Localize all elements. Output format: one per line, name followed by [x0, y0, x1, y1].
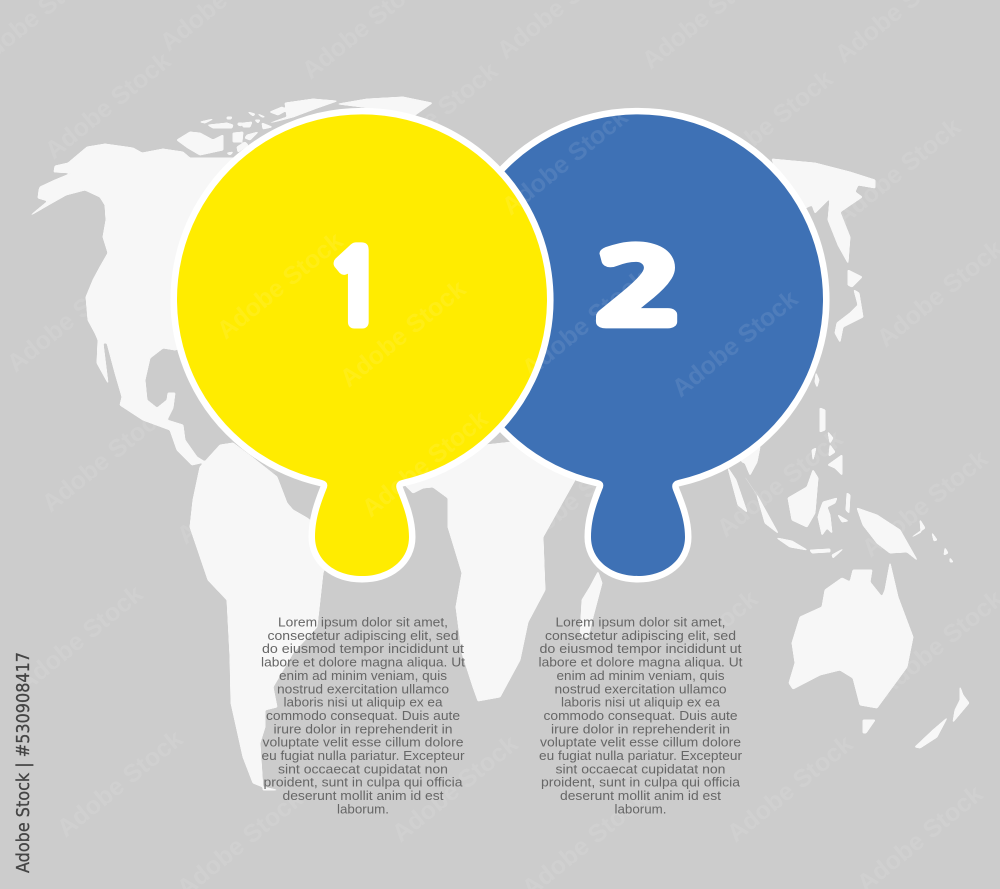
text block: left description: eu fugiat nulla pariatur. Excepteur: [262, 748, 465, 763]
watermark layer under shapes: Adobe Stock: [40, 47, 176, 165]
landmass: Tasmania: [863, 720, 875, 733]
text block: left description: Lorem ipsum dolor sit amet,: [278, 614, 448, 630]
text block: right description: do eiusmod tempor incididunt ut: [540, 641, 742, 656]
watermark layer under shapes: Adobe Stock: [712, 425, 848, 543]
landmass: Japan and Sakhalin: [835, 270, 863, 342]
watermark layer over shapes: Adobe Stock: [357, 405, 493, 523]
watermark layer under shapes: Adobe Stock: [172, 432, 308, 550]
text block: left description: [261, 614, 465, 816]
text block: left description: do eiusmod tempor incididunt ut: [262, 641, 464, 656]
number 2: 2: [595, 239, 683, 338]
watermark layer under shapes: Adobe Stock: [387, 730, 523, 848]
panel: yellow pin 1: [177, 114, 547, 576]
text block: right description: commodo consequat. Duis aute: [544, 708, 738, 723]
text block: left description: laborum.: [337, 801, 389, 816]
text block: left description: consectetur adipiscing elit, sed: [268, 628, 458, 643]
watermark layer under shapes: Adobe Stock: [830, 113, 966, 231]
text block: left description: voluptate velit esse cillum dolore: [262, 735, 464, 750]
panel: blue pin 2: [453, 114, 823, 576]
text block: right description: irure dolor in reprehenderit in: [551, 721, 730, 736]
watermark layer under shapes: Adobe Stock: [702, 65, 838, 183]
watermark layer under shapes: Adobe Stock: [722, 730, 858, 848]
text block: left description: commodo consequat. Duis aute: [266, 708, 460, 723]
text block: left description: enim ad minim veniam, quis: [279, 668, 448, 683]
watermark layer over shapes: [212, 103, 803, 523]
text block: right description: labore et dolore magna aliqua. Ut: [538, 655, 743, 670]
text block: left description: labore et dolore magna aliqua. Ut: [261, 655, 465, 670]
landmass: New Zealand: [915, 687, 969, 748]
text block: right description: deserunt mollit anim id est: [560, 788, 721, 803]
watermark layer under shapes: Adobe Stock: [367, 57, 503, 175]
text block: left description: deserunt mollit anim id est: [282, 788, 444, 803]
text block: left description: sint occaecat cupidatat non: [278, 761, 448, 776]
text block: left description: laboris nisi ut aliquip ex ea: [284, 695, 443, 710]
watermark layer under shapes: Adobe Stock: [12, 580, 148, 698]
landmass: Madagascar: [580, 572, 602, 637]
text block: right description: enim ad minim veniam, quis: [556, 668, 725, 683]
landmass: Australia: [789, 563, 913, 708]
watermark layer under shapes: Adobe Stock: [37, 400, 173, 518]
text block: left description: irure dolor in reprehenderit in: [274, 721, 452, 736]
watermark layer over shapes: Adobe Stock: [667, 285, 803, 403]
text block: right description: sint occaecat cupidatat non: [556, 761, 726, 776]
watermark layer under shapes: Adobe Stock: [627, 585, 763, 703]
text block: right description: eu fugiat nulla pariatur. Excepteur: [539, 748, 743, 763]
text block: right description: Lorem ipsum dolor sit amet,: [556, 614, 726, 630]
watermark layer under shapes: Adobe Stock: [52, 725, 188, 843]
text block: right description: consectetur adipiscing elit, sed: [545, 628, 736, 643]
text block: right description: nostrud exercitation ullamco: [554, 681, 726, 696]
landmass: South America: [190, 443, 335, 790]
text block: right description: laboris nisi ut aliquip ex ea: [561, 695, 721, 710]
number 1: 1: [326, 239, 386, 338]
text block: right description: [538, 614, 743, 816]
watermark layer over shapes: Adobe Stock: [497, 103, 633, 221]
landmass: North America: [31, 144, 300, 465]
text block: right description: laborum.: [614, 801, 666, 816]
watermark layer under shapes: Adobe Stock: [2, 260, 138, 378]
world map silhouette: [31, 97, 969, 790]
stock id side label: Adobe Stock | #530908417: [13, 652, 34, 873]
landmass: East Asia: [772, 159, 875, 263]
text block: right description: proident, sunt in culpa qui officia: [541, 775, 741, 790]
watermark layer over shapes: Adobe Stock: [517, 265, 653, 383]
landmass: Taiwan and Philippines: [812, 373, 842, 475]
text block: right description: voluptate velit esse cillum dolore: [540, 735, 741, 750]
landmass: South-East Asia: [728, 445, 953, 562]
watermark layer over shapes: Adobe Stock: [212, 227, 348, 345]
landmass: Arctic islands: [177, 99, 337, 155]
landmass: Greenland: [338, 97, 432, 125]
text block: left description: nostrud exercitation ullamco: [277, 681, 449, 696]
text block: left description: proident, sunt in culpa qui officia: [264, 775, 463, 790]
watermark layer under shapes: Adobe Stock: [857, 445, 993, 563]
watermark layer under shapes: Adobe Stock: [507, 440, 643, 558]
watermark layer over shapes: Adobe Stock: [335, 275, 471, 393]
landmass: Africa: [400, 440, 575, 701]
